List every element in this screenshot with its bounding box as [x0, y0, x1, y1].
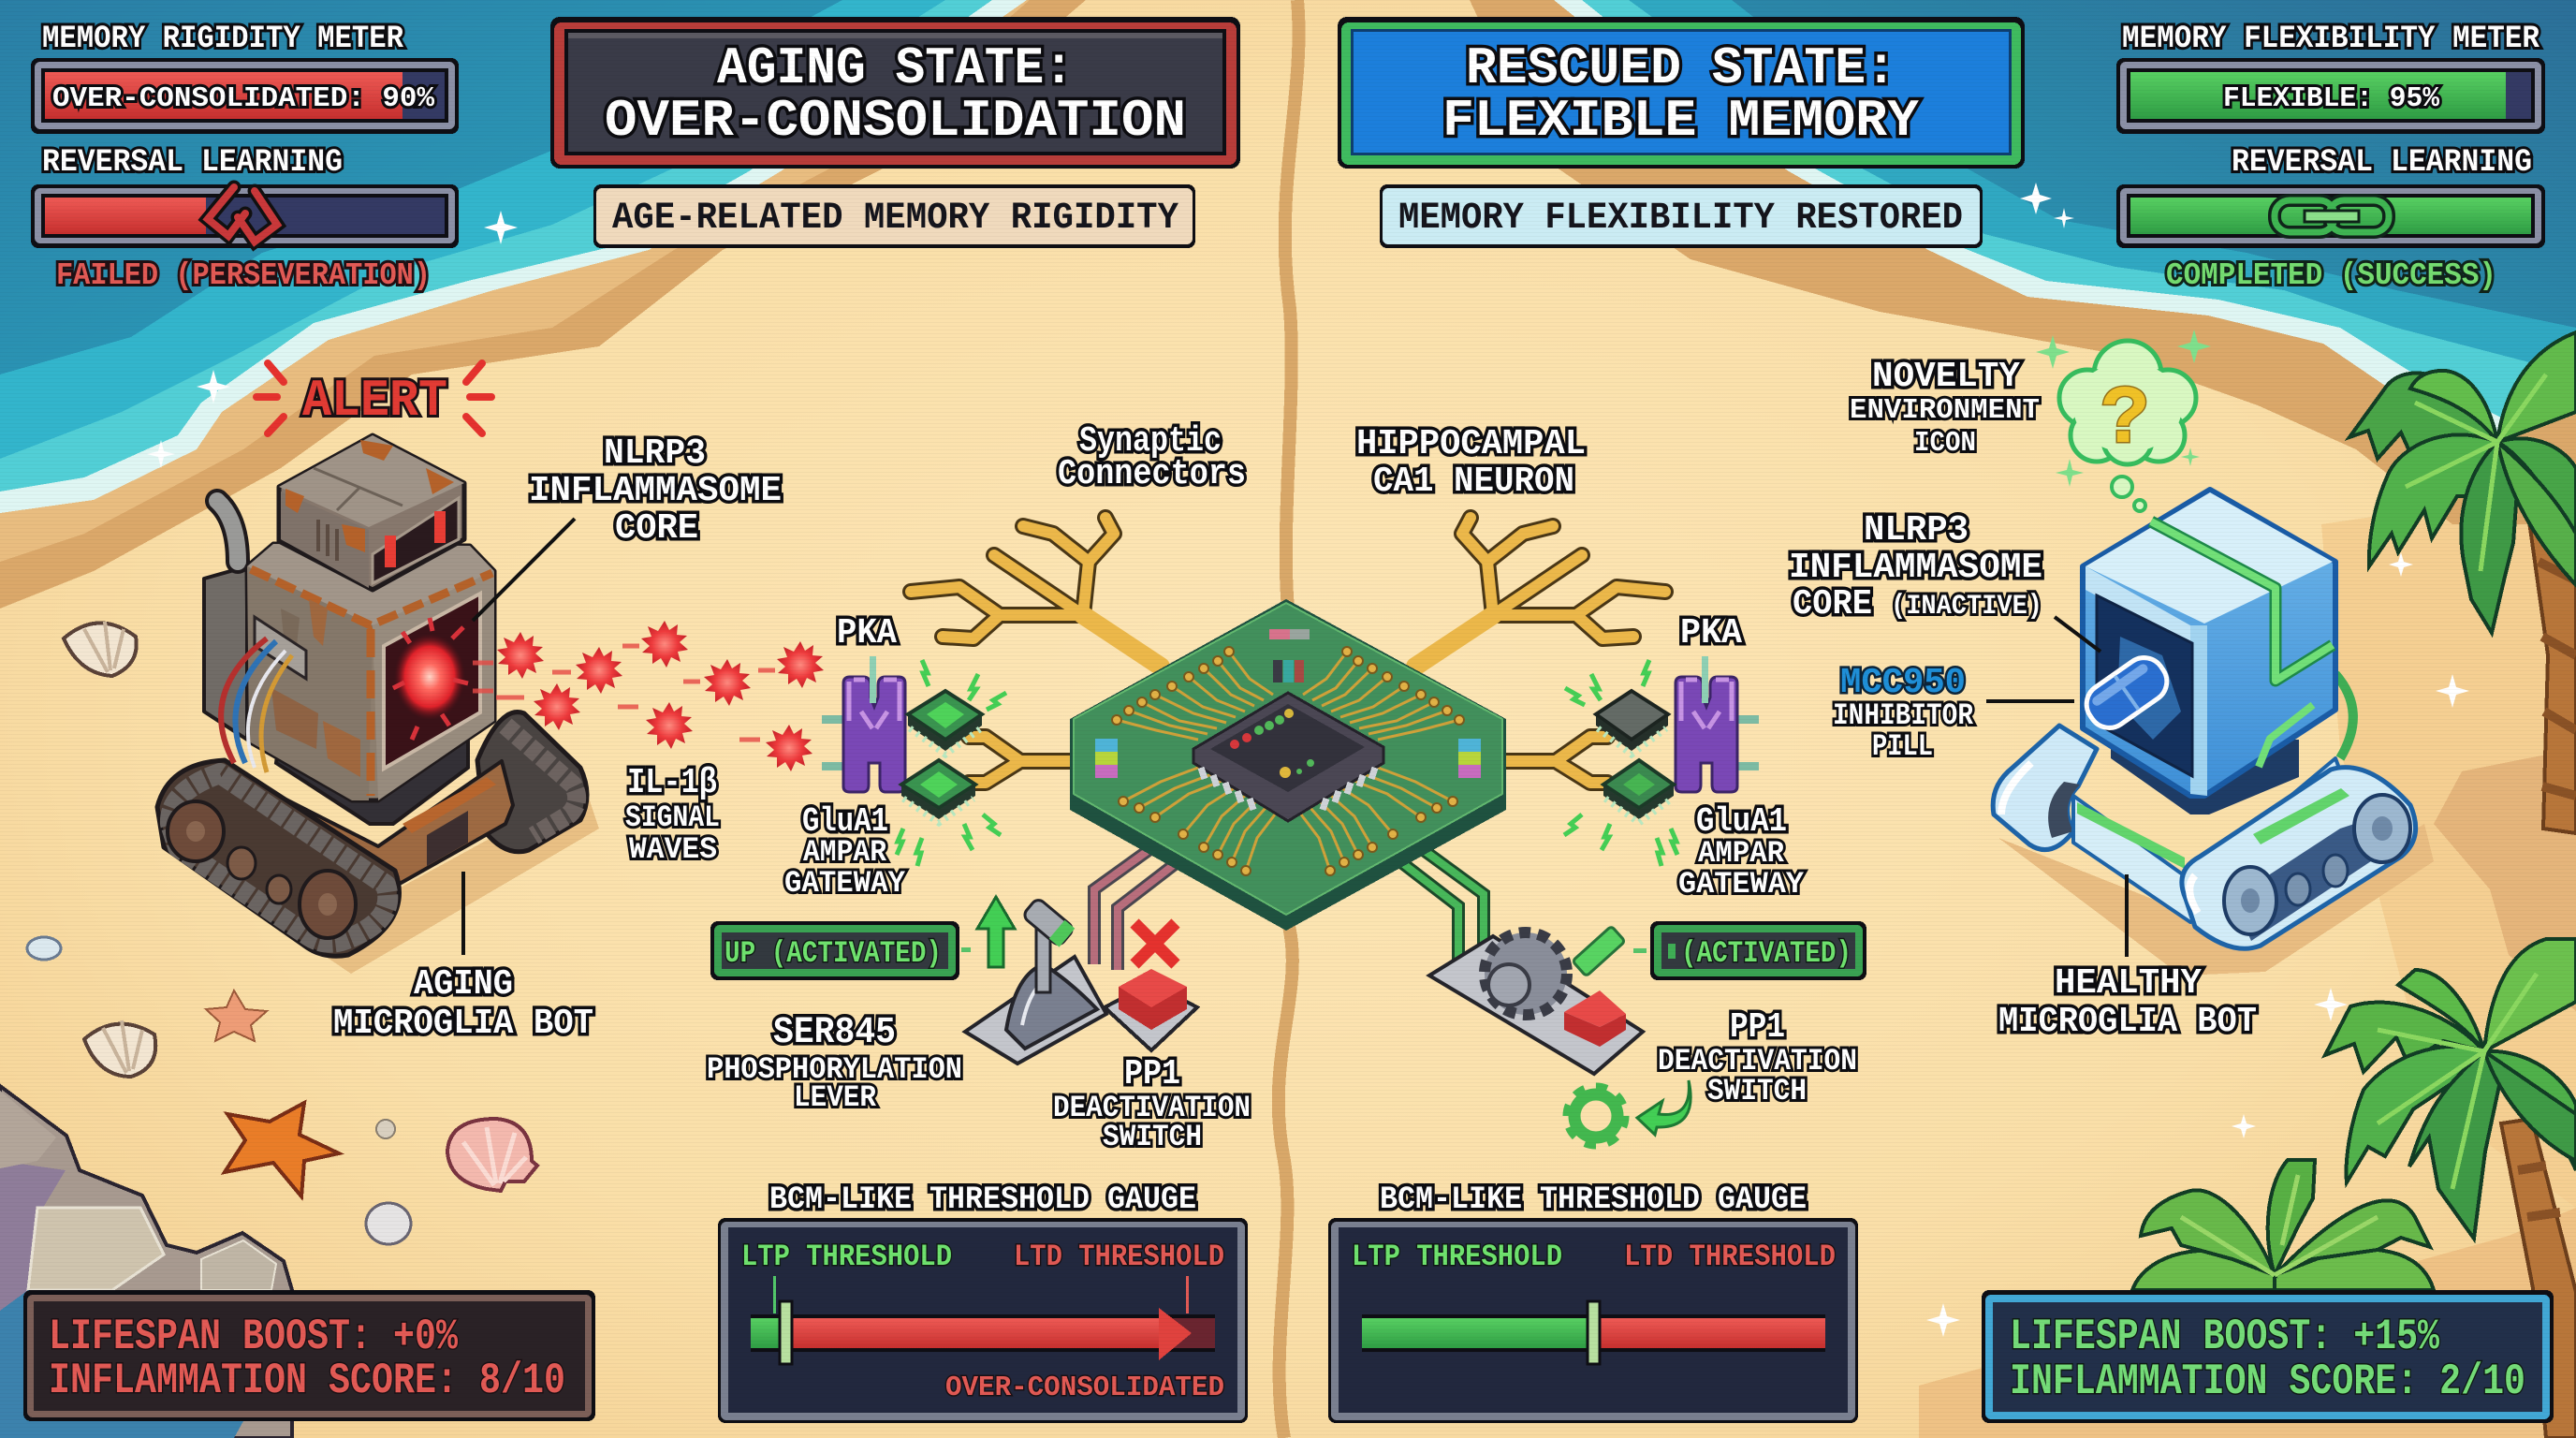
small starfish: [206, 990, 267, 1041]
LEDs: [1230, 709, 1314, 778]
label: MCC950 inhibitor pill: INHIBITOR: [1833, 698, 1974, 733]
sea sparkles: [147, 183, 2469, 1342]
shell: [84, 1020, 155, 1077]
healthy microglia bot: [1993, 490, 2434, 976]
activated pill right: (ACTIVATED): [1681, 936, 1852, 971]
right dendrites: [1415, 518, 1665, 783]
label: PP1 deactivation switch left: SWITCH: [1103, 1120, 1202, 1154]
bot shadow: [164, 786, 599, 974]
ser845 lever mechanism: [965, 897, 1106, 1064]
small pebble: [376, 1120, 395, 1138]
right gear mechanism: [1429, 932, 1643, 1074]
il-1beta signal particles: [473, 621, 824, 771]
label: synaptic connectors: Synaptic: [1079, 421, 1222, 462]
panel: rescued stats: [1982, 1290, 2554, 1423]
shell: [64, 622, 137, 676]
label: MCC950 inhibitor pill: MCC950: [1840, 663, 1966, 703]
lifespan line: LIFESPAN BOOST: +0%: [49, 1313, 458, 1361]
title frame: [550, 17, 1240, 169]
lever stem: [1036, 922, 1050, 992]
label: novelty environment icon: ENVIRONMENT: [1850, 394, 2040, 427]
gold traces right: [1301, 647, 1464, 875]
label: PP1 deactivation switch left: PP1: [1124, 1054, 1180, 1094]
label: GluA1 AMPAR gateway right: GATEWAY: [1678, 867, 1805, 902]
label: NLRP3 inflammasome core left: [473, 433, 782, 621]
label: MCC950 inhibitor pill: PILL: [1872, 729, 1933, 764]
reversal bar: [2116, 184, 2545, 248]
failed status: FAILED (PERSEVERATION): [56, 258, 431, 293]
over-consolidated tag: OVER-CONSOLIDATED: [945, 1372, 1224, 1404]
label: GluA1 AMPAR gateway right: GluA1: [1696, 802, 1787, 841]
gauge frame: [1328, 1218, 1858, 1423]
label: GluA1 AMPAR gateway left: GluA1: [802, 802, 888, 841]
chip lower: [901, 760, 975, 823]
label: healthy microglia bot: MICROGLIA BOT: [1998, 1002, 2257, 1042]
palm shadow: [2434, 749, 2576, 1011]
label: synaptic connectors: [1058, 421, 1246, 494]
label: GluA1 AMPAR gateway left: AMPAR: [803, 835, 887, 870]
dark screen: [2097, 595, 2192, 776]
reversal heading: REVERSAL LEARNING: [2232, 145, 2532, 181]
label: NLRP3 inflammasome core inactive: [1789, 510, 2100, 652]
label: aging microglia bot: MICROGLIA BOT: [333, 1004, 593, 1044]
label: NLRP3 inflammasome core left: NLRP3: [604, 433, 706, 474]
title line 2: FLEXIBLE MEMORY: [1442, 91, 1919, 151]
left PP1 switch: [1105, 969, 1197, 1050]
icon: green up arrow: [977, 897, 1015, 967]
label: IL-1beta signal waves: [625, 763, 720, 867]
body underside: [276, 730, 468, 824]
icon: green capsule: [1573, 926, 1647, 976]
lever handle: [1022, 897, 1075, 947]
body: [2083, 490, 2335, 796]
label: IL-1beta signal waves: SIGNAL: [625, 800, 720, 835]
panel: rescued state title: [1338, 17, 2025, 169]
receptor: [1676, 656, 1759, 792]
label: hippocampal CA1 neuron: CA1 NEURON: [1373, 462, 1574, 502]
core screen: [384, 594, 480, 769]
reversal heading: REVERSAL LEARNING: [42, 145, 343, 181]
blue pebble: [27, 937, 61, 960]
threshold bar: [751, 1276, 1215, 1364]
bot shadow: [1998, 824, 2434, 976]
lifespan line: LIFESPAN BOOST: +15%: [2010, 1313, 2439, 1361]
threshold bar: [1362, 1301, 1825, 1364]
front track: [157, 760, 399, 956]
rear track: [1993, 726, 2097, 850]
chip lower green: [1603, 760, 1674, 823]
left beach decorations: shells, starfish, rocks: [0, 622, 537, 1438]
label: MCC950 inhibitor pill: [1833, 663, 2074, 764]
panel: threshold gauge left: [718, 1218, 1248, 1423]
thought bubbles: [2112, 477, 2132, 497]
LTD label: LTD THRESHOLD: [1624, 1240, 1836, 1274]
green cables: [2335, 674, 2353, 758]
panel: threshold gauge right: [1328, 1218, 1858, 1423]
title line 1: RESCUED STATE:: [1466, 38, 1896, 98]
LTP label: LTP THRESHOLD: [741, 1240, 952, 1274]
reversal bar: [31, 184, 459, 248]
left AMPAR receptor and chips: [822, 656, 1006, 866]
label: PP1 deactivation switch left: DEACTIVATION: [1053, 1091, 1251, 1125]
question mark: ?: [2100, 374, 2150, 467]
orange starfish: [225, 1103, 339, 1196]
head: [279, 435, 464, 590]
label: SER845 phosphorylation lever: [707, 1012, 962, 1115]
label: NLRP3 inflammasome core inactive: NLRP3: [1864, 510, 1969, 550]
green sparks: [897, 660, 1006, 866]
red switch: [1564, 1012, 1626, 1047]
gauge frame: [718, 1218, 1248, 1423]
label: GluA1 AMPAR gateway left: GATEWAY: [784, 866, 906, 901]
title frame: [1338, 17, 2025, 169]
body underside: [2111, 740, 2299, 814]
chip upper: [908, 691, 982, 755]
aging microglia bot: [157, 435, 599, 974]
label: healthy microglia bot: HEALTHY: [2055, 963, 2202, 1004]
inflammation line: INFLAMMATION SCORE: 8/10: [49, 1357, 565, 1405]
subtitle: memory flexibility restored: [1380, 184, 1983, 248]
right reversal learning meter: [2116, 145, 2545, 293]
label: GluA1 AMPAR gateway right: AMPAR: [1698, 836, 1785, 871]
title line 2: OVER-CONSOLIDATION: [605, 91, 1186, 151]
label: SER845 phosphorylation lever: LEVER: [794, 1080, 877, 1115]
front track: [2182, 768, 2416, 948]
label: PP1 deactivation switch left: [1053, 1054, 1251, 1154]
central IC: [1193, 693, 1383, 821]
colour components: [1095, 629, 1481, 778]
label: PP1 deactivation switch right: PP1: [1730, 1007, 1785, 1048]
alert text: ALERT: [302, 371, 447, 431]
cable port and wires: [221, 617, 306, 772]
board: [1070, 599, 1506, 931]
flexibility value: FLEXIBLE: 95%: [2223, 82, 2439, 115]
label: NLRP3 inflammasome core left: INFLAMMASOME: [529, 471, 782, 511]
lever housing: [1006, 964, 1097, 1049]
icon: connected chain: [2275, 200, 2389, 232]
LTD label: LTD THRESHOLD: [1014, 1240, 1224, 1274]
label: SER845 phosphorylation lever: SER845: [773, 1012, 896, 1054]
subtitle: age-related memory rigidity: AGE-RELATED MEMORY RIGIDITY: [612, 198, 1178, 240]
left dendrites: [911, 518, 1161, 783]
grey gear: [1485, 932, 1567, 1015]
label: NLRP3 inflammasome core inactive: INFLAMMASOME: [1789, 548, 2042, 588]
front palm crown: [2132, 1160, 2434, 1290]
label: healthy microglia bot: [1998, 874, 2257, 1042]
gauge title right: BCM-LIKE THRESHOLD GAUGE: [1380, 1182, 1807, 1218]
rigidity value: OVER-CONSOLIDATED: 90%: [52, 82, 434, 115]
label: novelty environment icon: NOVELTY: [1872, 357, 2020, 397]
LTP label: LTP THRESHOLD: [1352, 1240, 1562, 1274]
label: SER845 phosphorylation lever: PHOSPHORYLATION: [707, 1052, 962, 1087]
title line 1: AGING STATE:: [717, 38, 1074, 98]
label: NLRP3 inflammasome core inactive: CORE: [1793, 584, 1872, 624]
sparkles: [2036, 330, 2211, 487]
label: aging microglia bot: AGING: [414, 964, 513, 1005]
icon: red x: [1134, 923, 1176, 964]
gauge title left: BCM-LIKE THRESHOLD GAUGE: [769, 1182, 1196, 1218]
rigidity bar: [31, 58, 459, 134]
left reversal learning meter: [31, 145, 459, 293]
label: NLRP3 inflammasome core left: CORE: [615, 508, 698, 549]
label: PKA left: PKA: [837, 613, 897, 653]
meter heading: MEMORY FLEXIBILITY METER: [2122, 22, 2540, 57]
label: GluA1 AMPAR gateway left: [784, 802, 906, 901]
label: PKA right: PKA: [1680, 613, 1742, 653]
icon: green gear: [1567, 1087, 1625, 1145]
label: IL-1beta signal waves: IL-1β: [627, 763, 717, 803]
cloud: [2059, 341, 2196, 464]
right AMPAR receptor and chips: [1564, 656, 1759, 866]
upper palm: [2349, 332, 2576, 833]
icon: curved green arrow: [1637, 1080, 1690, 1135]
mechanism base: [1429, 936, 1643, 1074]
rear track: [477, 712, 587, 852]
panel: aging state title: [550, 17, 1240, 169]
green sparks: [1564, 660, 1677, 866]
label: PP1 deactivation switch right: DEACTIVATION: [1658, 1044, 1857, 1078]
pebble: [366, 1203, 411, 1244]
wires to left lever: [1094, 848, 1175, 970]
right beach palms: [2132, 332, 2576, 1438]
lower right palm: [2325, 939, 2576, 1438]
gold traces left: [1112, 647, 1275, 875]
label: PP1 deactivation switch right: SWITCH: [1707, 1074, 1807, 1108]
wires to right mechanism: [1401, 848, 1484, 961]
alert badge: [256, 363, 491, 433]
icon: novelty thought cloud: [2036, 330, 2211, 511]
receptor: [822, 656, 905, 792]
chassis: [2073, 758, 2349, 922]
lever base: [965, 957, 1106, 1064]
label: hippocampal CA1 neuron: [1356, 424, 1586, 502]
chip upper grey: [1596, 691, 1668, 755]
rocks: [0, 1086, 292, 1438]
activated pill right: [1650, 921, 1866, 980]
label: novelty environment icon: ICON: [1914, 427, 1976, 460]
label: PP1 deactivation switch right: [1658, 1007, 1857, 1108]
completed status: COMPLETED (SUCCESS): [2166, 258, 2496, 293]
left meter: memory rigidity: [31, 22, 459, 134]
label: NLRP3 inflammasome core inactive: (INACTIVE): [1891, 591, 2042, 623]
label: novelty environment icon: [1850, 357, 2040, 460]
icon: broken chain: [208, 187, 277, 242]
label: aging microglia bot: [333, 872, 593, 1044]
subtitle: memory flexibility restored: MEMORY FLEXIBILITY RESTORED: [1398, 198, 1963, 240]
label: IL-1beta signal waves: WAVES: [629, 832, 717, 867]
label: synaptic connectors: Connectors: [1058, 454, 1246, 494]
glowing visor: [373, 498, 459, 583]
subtitle: age-related memory rigidity: [593, 184, 1195, 248]
alert rays: [256, 363, 491, 433]
chassis: [271, 761, 513, 885]
flexibility bar: [2116, 58, 2545, 134]
body: [247, 544, 494, 800]
up activated pill: [710, 921, 971, 980]
label: GluA1 AMPAR gateway right: [1678, 802, 1805, 902]
central circuit board chip: [1070, 599, 1506, 931]
right meter: memory flexibility: [2116, 22, 2545, 134]
pink shell: [447, 1119, 537, 1191]
meter heading: MEMORY RIGIDITY METER: [42, 22, 404, 57]
label: hippocampal CA1 neuron: HIPPOCAMPAL: [1356, 424, 1586, 464]
icon: MCC950 pill: [2079, 650, 2174, 736]
up activated pill: UP (ACTIVATED): [724, 936, 942, 971]
exhaust pipe and back box: [204, 501, 247, 740]
panel: aging stats: [23, 1290, 595, 1421]
